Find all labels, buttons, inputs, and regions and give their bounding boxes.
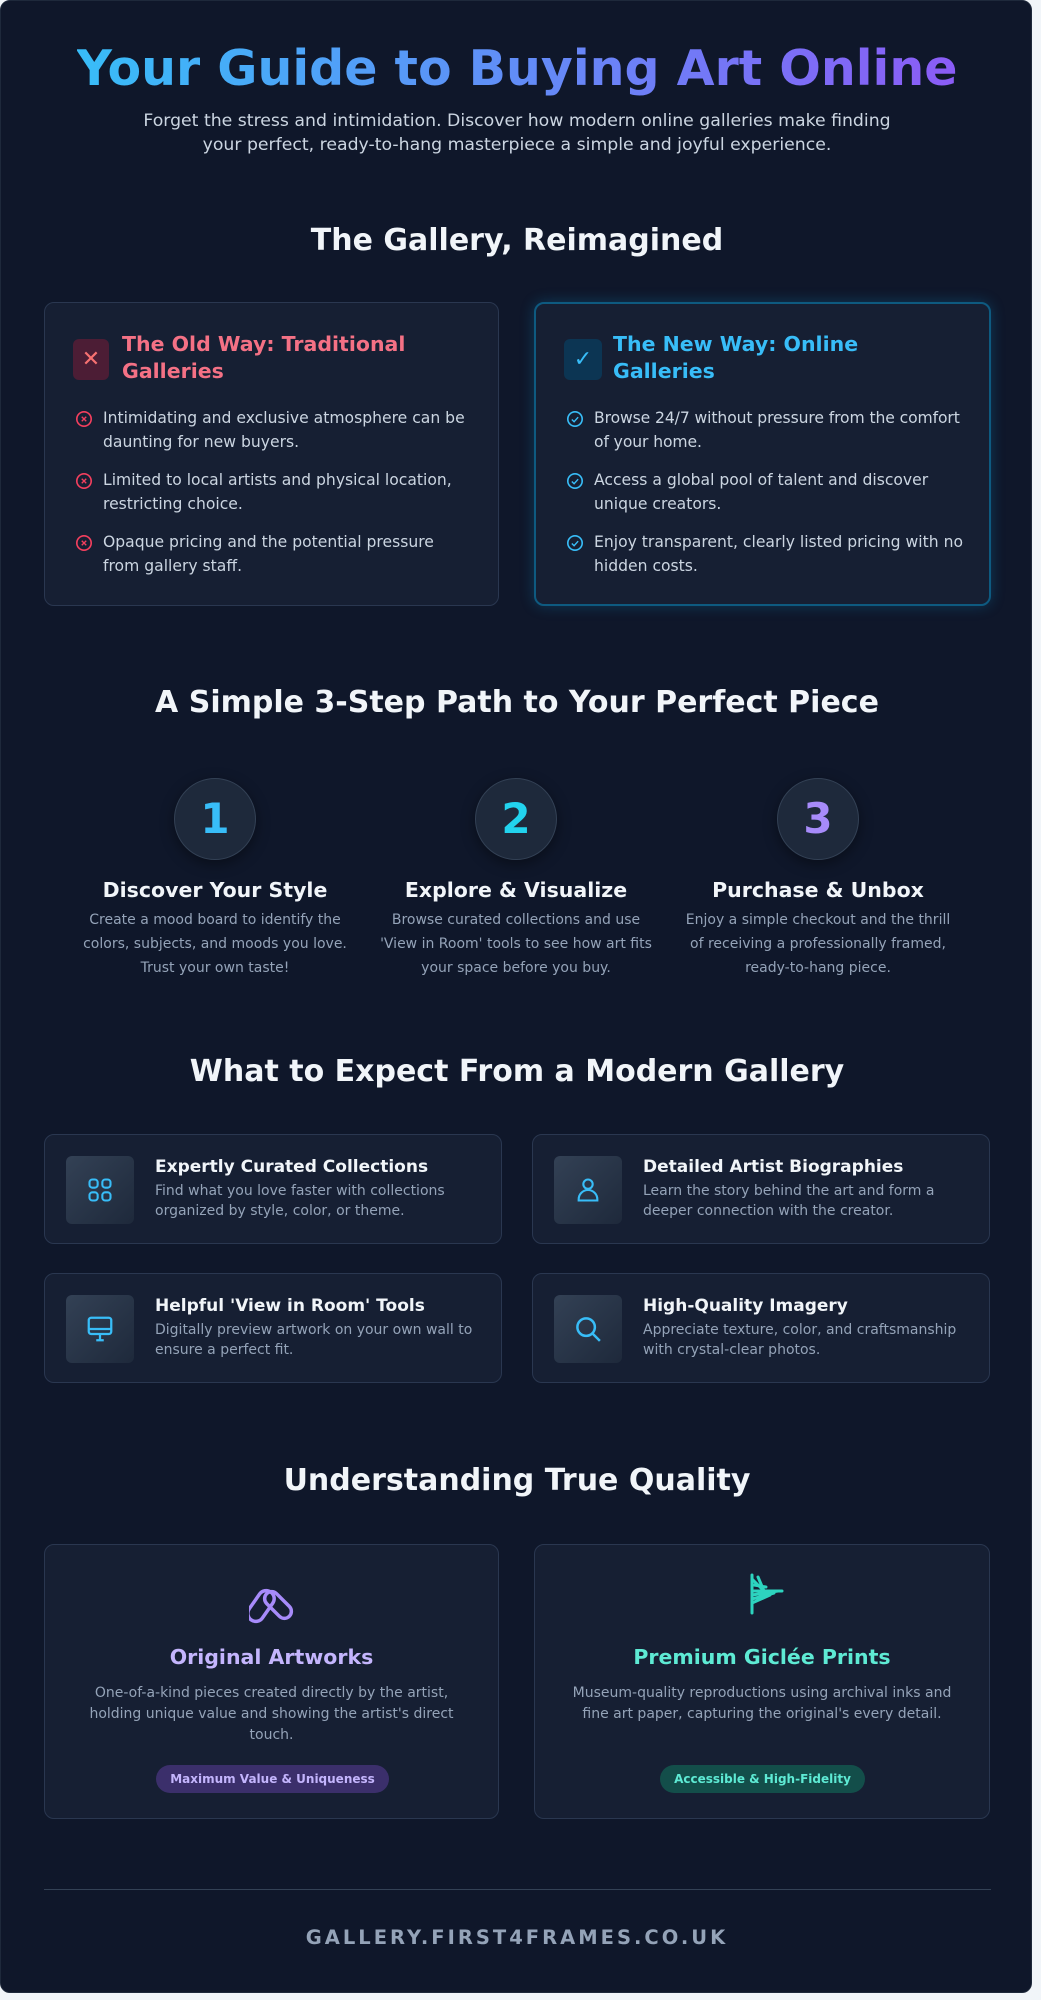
text	[155, 1296, 472, 1358]
icon: person	[554, 1156, 622, 1224]
step 3	[686, 778, 950, 976]
text: Learn the story behind the art and form a deeper connection with the creator.	[643, 1183, 934, 1219]
bullet 3: Enjoy transparent, clearly listed pricing with no hidden costs.	[594, 533, 963, 575]
step 2	[380, 778, 652, 976]
title: Premium Giclée Prints	[633, 1645, 891, 1669]
icon: search	[554, 1295, 622, 1363]
number 3	[777, 778, 859, 860]
title: Original Artworks	[170, 1645, 373, 1669]
text: Appreciate texture, color, and craftsmanship with crystal-clear photos.	[643, 1322, 956, 1358]
text	[643, 1296, 956, 1358]
panel: new way	[534, 302, 991, 606]
text: Helpful 'View in Room' Tools	[155, 1296, 425, 1316]
step 3 text: Enjoy a simple checkout and the thrill of receiving a professionally framed, ready-to-hang piece.	[686, 912, 950, 976]
panel: old way	[44, 302, 499, 606]
number 1	[174, 778, 256, 860]
desc: One-of-a-kind pieces created directly by the artist, holding unique value and showing the artist's direct touch.	[89, 1685, 454, 1743]
badge	[156, 1765, 389, 1793]
step 1	[83, 778, 347, 976]
icon: x	[73, 339, 109, 380]
step 1 text: Create a mood board to identify the colors, subjects, and moods you love. Trust your own taste!	[83, 912, 347, 976]
bullet 1: Intimidating and exclusive atmosphere can be daunting for new buyers.	[103, 409, 465, 451]
heading: true quality: Understanding True Quality	[284, 1463, 750, 1498]
heading: old way: Galleries	[122, 359, 224, 383]
icon: monitor	[66, 1295, 134, 1363]
feature: view in room	[44, 1273, 502, 1383]
heading: gallery reimagined: The Gallery, Reimagined	[311, 223, 723, 258]
number 2	[475, 778, 557, 860]
text	[155, 1157, 445, 1219]
step 1 text	[83, 878, 347, 976]
badge	[660, 1765, 865, 1793]
number 1: 1	[200, 794, 230, 843]
icon: check	[564, 339, 602, 380]
step 2 text	[380, 878, 652, 976]
heading: new way: The New Way: Online	[613, 332, 858, 356]
heading: 3 steps: A Simple 3-Step Path to Your Perfect Piece	[155, 685, 879, 720]
heading: old way	[122, 332, 405, 383]
text: Digitally preview artwork on your own wall to ensure a perfect fit.	[155, 1322, 472, 1358]
icon: brush	[249, 1588, 294, 1624]
bullet 1: Browse 24/7 without pressure from the comfort of your home.	[594, 409, 960, 451]
number 2: 2	[501, 794, 531, 843]
bullet 2: Limited to local artists and physical location, restricting choice.	[103, 471, 452, 513]
number 3: 3	[803, 794, 833, 843]
text: Find what you love faster with collections organized by style, color, or theme.	[155, 1183, 445, 1219]
text: High-Quality Imagery	[643, 1296, 848, 1316]
text: Detailed Artist Biographies	[643, 1157, 903, 1177]
heading: old way: The Old Way: Traditional	[122, 332, 405, 356]
title: Your Guide to Buying Art Online	[76, 40, 957, 97]
step 2 text: Browse curated collections and use 'View in Room' tools to see how art fits your space before you buy.	[380, 912, 652, 976]
heading: new way: Galleries	[613, 359, 715, 383]
icon: print splash	[750, 1574, 784, 1614]
icon: check: ✓	[574, 347, 592, 372]
feature: imagery	[532, 1273, 990, 1383]
feature: curated	[44, 1134, 502, 1244]
icon: grid	[66, 1156, 134, 1224]
badge: Accessible & High-Fidelity	[674, 1772, 851, 1786]
feature: biographies	[532, 1134, 990, 1244]
desc: Museum-quality reproductions using archival inks and fine art paper, capturing the original's every detail.	[573, 1685, 951, 1722]
bullet 3: Opaque pricing and the potential pressure from gallery staff.	[103, 533, 434, 575]
panel: giclee prints	[534, 1544, 990, 1819]
text: Expertly Curated Collections	[155, 1157, 428, 1177]
bullet 2: Access a global pool of talent and discover unique creators.	[594, 471, 928, 513]
step 3 text: Purchase & Unbox	[712, 878, 924, 902]
footer: GALLERY.FIRST4FRAMES.CO.UK	[306, 1926, 728, 1949]
badge: Maximum Value & Uniqueness	[170, 1772, 375, 1786]
step 1 text: Discover Your Style	[103, 878, 327, 902]
heading: new way	[613, 332, 858, 383]
icon: x: ✕	[82, 347, 100, 372]
step 3 text	[686, 878, 950, 976]
subtitle: Forget the stress and intimidation. Discover how modern online galleries make finding your perfect, ready-to-hang masterpiece a simple and joyful experience.	[143, 111, 891, 155]
panel: original artworks	[44, 1544, 499, 1819]
heading: what to expect: What to Expect From a Modern Gallery	[190, 1054, 844, 1089]
text	[643, 1157, 934, 1219]
step 2 text: Explore & Visualize	[405, 878, 627, 902]
